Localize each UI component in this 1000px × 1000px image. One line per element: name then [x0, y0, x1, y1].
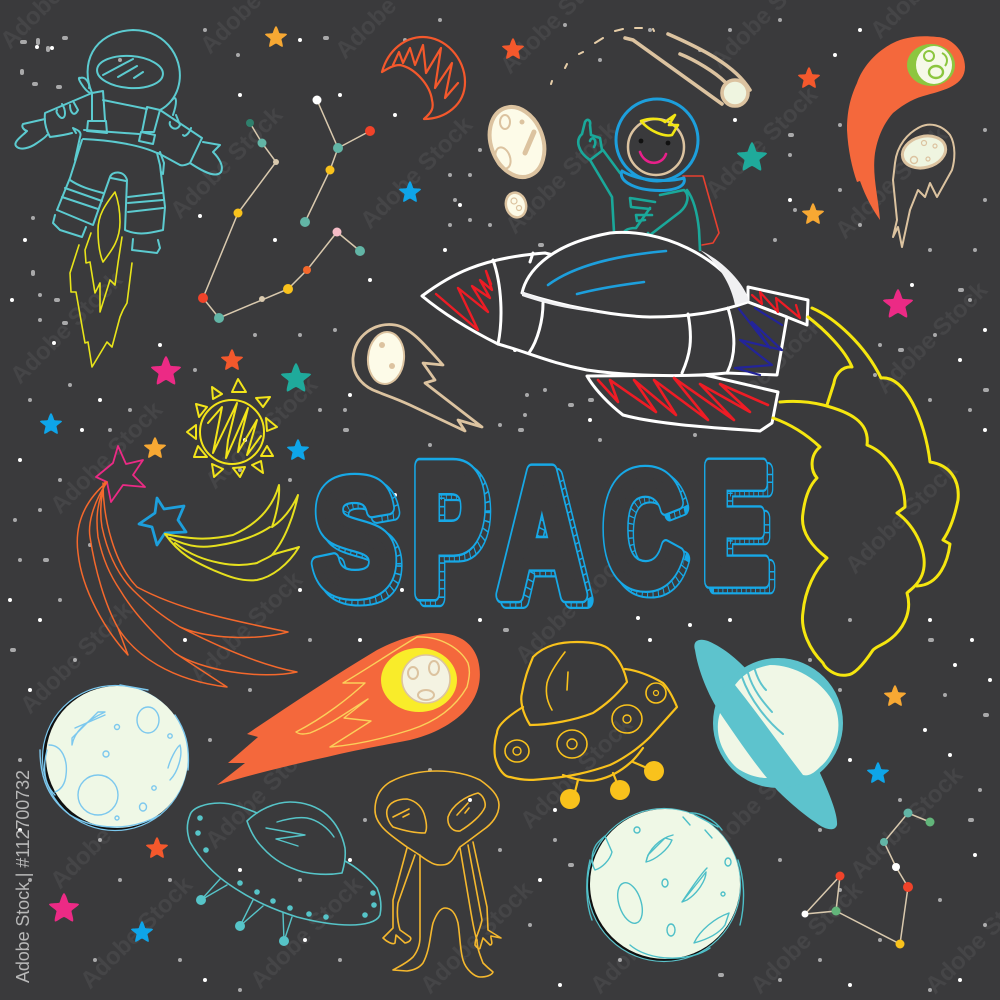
title shadow outline: S [318, 453, 401, 632]
rocket top fin [748, 287, 808, 325]
watermark: Adobe Stock [185, 566, 308, 689]
rocket ribs [493, 253, 734, 373]
watermark: Adobe Stock [585, 876, 708, 999]
dome highlight [700, 250, 749, 305]
watermark: Adobe Stock [200, 731, 323, 854]
title shadow interior: C [608, 446, 688, 624]
title outline: C [603, 441, 683, 619]
title face: E [702, 431, 769, 617]
orange comet bottom [217, 633, 480, 785]
watermark: Adobe Stock [845, 761, 968, 884]
crescent moon [382, 37, 465, 119]
title shadow interior: A [503, 439, 591, 639]
hair [641, 115, 678, 135]
watermark: Adobe Stock [745, 876, 868, 999]
yellow banana comet [165, 485, 299, 580]
watermark: Adobe Stock [15, 596, 138, 719]
astronaut suit [15, 30, 222, 253]
watermark: Adobe Stock [5, 266, 128, 389]
stock id watermark: Adobe Stock | #112700732 [13, 770, 33, 983]
rocket [422, 232, 808, 431]
watermark: Adobe Stock [705, 311, 828, 434]
rocket fuselage [422, 253, 787, 376]
constellation: top centre [198, 96, 375, 323]
tan meteor top right [893, 125, 954, 247]
sun [187, 379, 277, 477]
backpack [683, 176, 719, 245]
title hatching: A [503, 439, 591, 639]
title shadow outline: E [707, 436, 774, 622]
watermark: Adobe Stock [870, 276, 993, 399]
shooting star trail [77, 446, 297, 687]
red scribble fin bottom [598, 378, 768, 420]
red scribble fin top [752, 292, 800, 318]
title hatching: S [318, 453, 401, 632]
title face: S [313, 448, 396, 627]
asteroid small [503, 190, 529, 220]
watermark: Adobe Stock [695, 741, 818, 864]
smile [640, 152, 666, 163]
cream meteor centre [353, 325, 482, 431]
rocket bottom fin [587, 375, 778, 431]
title SPACE [313, 427, 774, 639]
watermark: Adobe Stock [355, 111, 478, 234]
watermark: Adobe Stock [510, 546, 633, 669]
title outline [313, 427, 769, 634]
title hatching [318, 432, 774, 639]
ringed planet [694, 640, 843, 829]
title hatching: P [417, 432, 490, 638]
eyes [639, 139, 643, 143]
title shadow interior [318, 432, 774, 639]
title shadow outline: A [503, 439, 591, 639]
title face: A [498, 434, 586, 634]
face [628, 119, 684, 175]
rocket exhaust smoke [773, 308, 958, 675]
watermark: Adobe Stock [700, 81, 823, 204]
title shadow interior: P [417, 432, 490, 638]
window reflections [548, 251, 666, 294]
moon bottom [587, 808, 744, 962]
comet top [551, 28, 750, 106]
watermark: Adobe Stock [165, 101, 288, 224]
UFO yellow [494, 642, 677, 809]
title outline: S [313, 448, 396, 627]
asteroid large [480, 99, 554, 185]
watermark: Adobe Stock [840, 456, 963, 579]
watermark: Adobe Stock [415, 876, 538, 999]
watermark: Adobe Stock [45, 771, 168, 894]
collar [621, 171, 684, 190]
rocket dome [522, 232, 748, 317]
title hatching: C [608, 446, 688, 624]
title face [313, 427, 769, 634]
title shadow interior: S [318, 453, 401, 632]
flame [70, 192, 132, 367]
title shadow outline [318, 432, 774, 639]
constellation bottom right [802, 808, 934, 948]
title outline: E [702, 431, 769, 617]
orange tails [77, 482, 297, 687]
watermark: Adobe Stock [515, 711, 638, 834]
watermark: Adobe Stock [75, 871, 198, 994]
title outline: A [498, 434, 586, 634]
title outline: P [412, 427, 485, 633]
boy astronaut [578, 99, 719, 250]
astronaut with jetpack flame [15, 30, 222, 367]
UFO teal [187, 802, 381, 946]
title face: C [603, 441, 683, 619]
alien [375, 771, 501, 977]
watermark: Adobe Stock [45, 396, 168, 519]
title shadow outline: C [608, 446, 688, 624]
blue star [139, 498, 186, 545]
watermark: Adobe Stock [200, 371, 323, 494]
watermark: Adobe Stock [830, 121, 953, 244]
watermark: Adobe Stock [500, 116, 623, 239]
title hatching: E [707, 436, 774, 622]
helmet [616, 99, 698, 181]
title face: P [412, 427, 485, 633]
red scribble nose [436, 271, 492, 330]
title shadow interior: E [707, 436, 774, 622]
title shadow outline: P [417, 432, 490, 638]
pink star [96, 446, 145, 502]
watermark: Adobe Stock [540, 241, 663, 364]
small colored stars [40, 26, 913, 942]
blue scribble [735, 308, 782, 375]
orange comet with green head [847, 36, 965, 220]
suit [578, 120, 700, 250]
watermark: Adobe Stock [245, 871, 368, 994]
moon left [40, 685, 188, 830]
